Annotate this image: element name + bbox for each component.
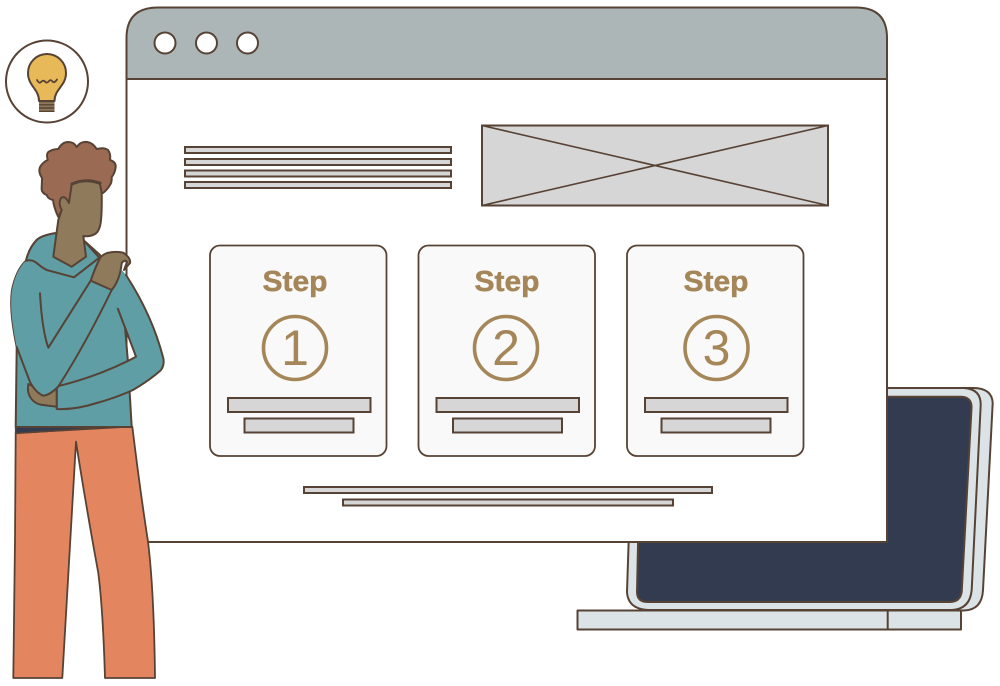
card: step 3: [627, 246, 804, 456]
icon: light bulb: [6, 40, 88, 122]
card: step 1: [210, 246, 386, 456]
step 1 heading: Step: [262, 266, 328, 298]
panel: browser window: [126, 8, 887, 542]
step 3 heading: Step: [684, 266, 748, 298]
image placeholder: [482, 126, 828, 206]
step 1 number: [264, 316, 326, 380]
laptop screen: [637, 397, 972, 602]
back arm sleeve: [57, 256, 164, 409]
torso: [11, 233, 132, 427]
text placeholder lines: [185, 147, 451, 188]
step 2 bars: [436, 398, 579, 432]
laptop base: [578, 610, 961, 630]
icon: laptop: [578, 388, 993, 630]
step 3 number: 3: [703, 320, 730, 376]
window buttons: [154, 32, 258, 54]
laptop back panel: [900, 388, 993, 610]
step 1 number: 1: [281, 320, 309, 376]
front arm sleeve: [11, 261, 112, 396]
step 2 number: 2: [492, 320, 520, 376]
raised hand: [91, 252, 130, 290]
step 3 number: [685, 316, 748, 380]
laptop bezel: [627, 388, 981, 610]
footer placeholder lines: [304, 487, 712, 506]
step 3 bars: [645, 398, 788, 432]
hair fringe: [72, 181, 100, 184]
lower hand: [28, 384, 57, 407]
step 1 bars: [228, 398, 370, 432]
step 2 number: [474, 316, 538, 380]
hood collar: [26, 233, 99, 277]
window title bar: [126, 8, 887, 79]
back arm outline: [57, 275, 164, 409]
card: step 2: [418, 246, 595, 456]
front arm outline: [17, 281, 112, 396]
person: thinking figure: [11, 142, 164, 678]
window body: [126, 60, 887, 542]
hair: [39, 142, 116, 217]
pants: [13, 426, 155, 678]
face and neck: [53, 181, 102, 267]
step 2 heading: Step: [474, 266, 540, 298]
belt: [16, 426, 132, 433]
